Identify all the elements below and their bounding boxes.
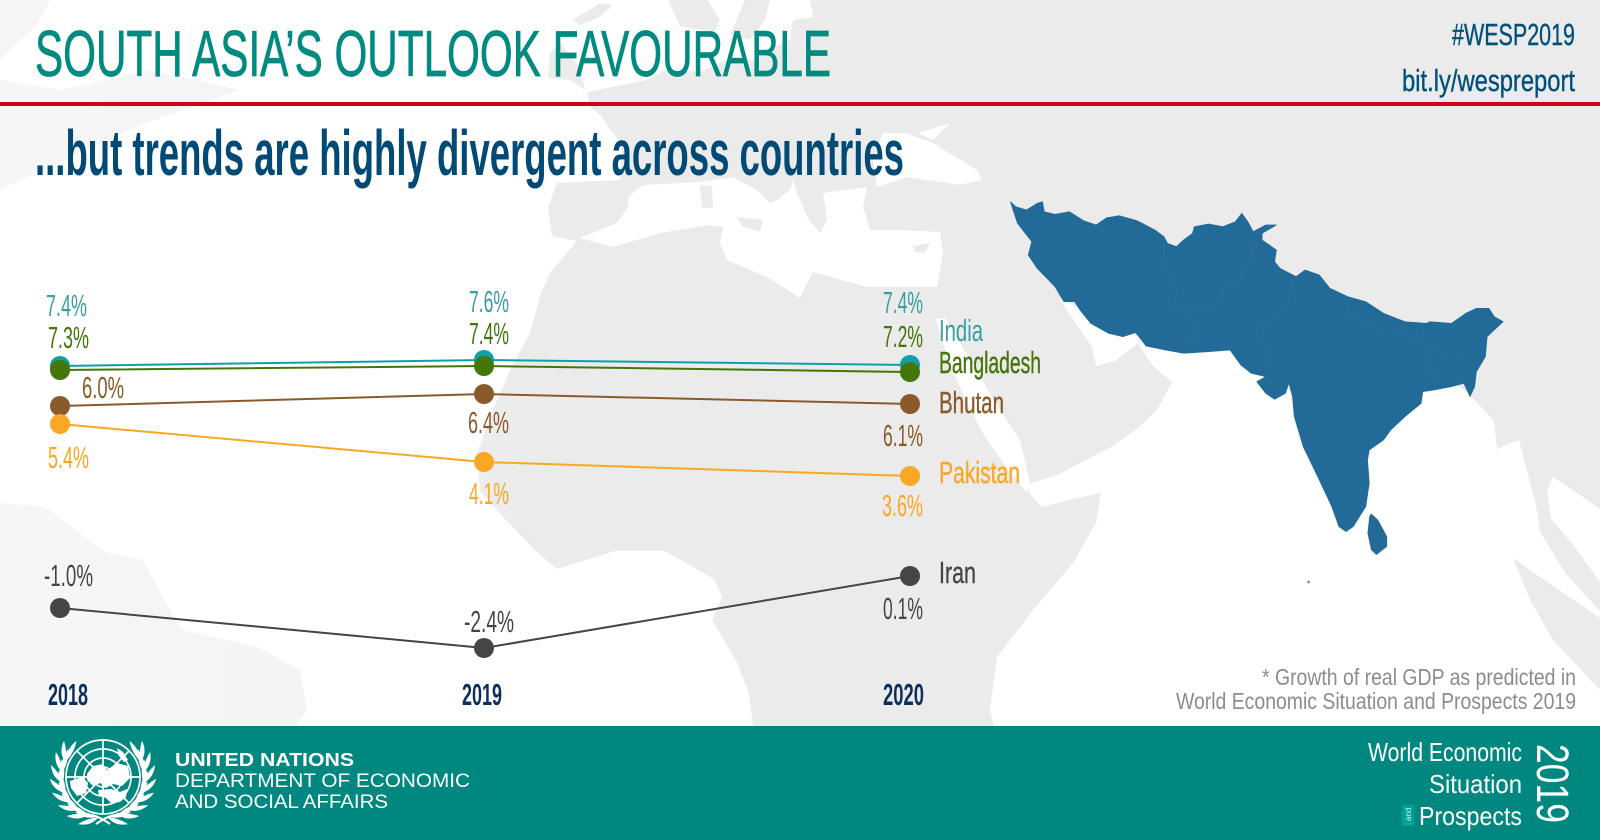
series: India: 7.4% [883,285,923,320]
series: Bangladesh: 7.3% [48,320,89,355]
series: India: 7.6% [469,284,509,319]
subtitle: ...but trends are highly divergent across countries [35,117,904,189]
hashtag and link [1402,17,1575,98]
WESP 2019 report logo [1368,737,1578,831]
series: Bangladesh: 7.4% [469,316,509,351]
year axis labels: 2020 [883,677,924,712]
UN DESA wordmark: DEPARTMENT OF ECONOMIC [175,771,470,792]
title: SOUTH ASIA’S OUTLOOK FAVOURABLE [35,17,831,90]
WESP 2019 report logo: and [1404,808,1413,821]
line chart: GDP growth by country [44,284,1041,712]
series: Pakistan [48,414,1020,523]
series: Bhutan [50,370,1004,453]
red header rule [0,102,1600,106]
UN DESA wordmark: UNITED NATIONS [175,749,354,770]
series: India: 7.4% [46,288,87,323]
series: Pakistan: 5.4% [48,440,89,475]
series: Bhutan: 6.0% [82,370,124,405]
year axis labels: 2019 [462,677,502,712]
map: South Asia region [1010,202,1503,583]
WESP 2019 report logo: Prospects [1419,801,1522,831]
series: Bangladesh: 7.2% [883,319,923,354]
series: Iran: Iran [939,555,976,590]
series: Iran: -2.4% [464,604,514,639]
WESP 2019 report logo: Situation [1429,769,1522,799]
series: Pakistan: 3.6% [882,488,923,523]
series: Bangladesh: Bangladesh [939,345,1041,380]
series: India: India [939,313,983,348]
UN DESA wordmark: AND SOCIAL AFFAIRS [175,792,388,813]
UN emblem [48,735,158,829]
series: India [46,284,983,376]
series: Bhutan: 6.4% [468,405,509,440]
footnote [1176,664,1576,714]
series: Iran: -1.0% [44,558,93,593]
series: Iran: 0.1% [883,591,923,626]
series: Bhutan: Bhutan [939,385,1004,420]
series: Iran [44,555,976,658]
year axis labels: 2018 [48,677,88,712]
series: Pakistan: Pakistan [939,455,1020,490]
year axis labels [48,677,924,712]
series: Bangladesh [48,316,1041,382]
UN DESA wordmark [175,749,470,813]
WESP 2019 report logo: World Economic [1368,737,1522,767]
series: Pakistan: 4.1% [469,476,509,511]
footer band [0,726,1600,840]
series: Bhutan: 6.1% [883,418,923,453]
